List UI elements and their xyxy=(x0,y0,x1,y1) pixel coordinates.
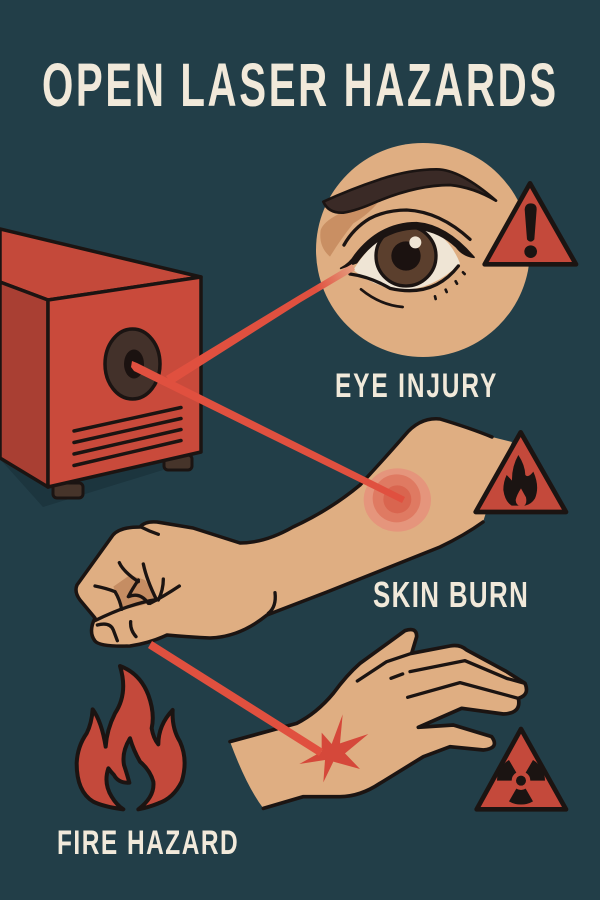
fist details xyxy=(95,527,275,641)
warning triangle: radiation xyxy=(477,729,566,809)
warning triangle: exclamation xyxy=(485,183,576,264)
laser beam to arm xyxy=(131,361,405,503)
iris xyxy=(376,226,436,286)
eye drawing xyxy=(320,169,496,307)
label: fire hazard: FIRE HAZARD xyxy=(57,824,238,862)
arm with fist xyxy=(76,419,512,646)
lens xyxy=(105,329,160,399)
laser beam to eye xyxy=(166,264,355,384)
laser beam to hand xyxy=(148,641,323,756)
eye panel xyxy=(316,143,530,357)
laser strike star xyxy=(299,714,368,782)
warning triangle: flame xyxy=(476,432,566,512)
vents xyxy=(74,408,181,466)
title: OPEN LASER HAZARDS xyxy=(42,51,556,119)
box foot: left xyxy=(53,483,83,498)
box foot: right xyxy=(164,455,192,470)
label: eye injury: EYE INJURY xyxy=(335,367,496,405)
hand with laser strike xyxy=(230,630,526,808)
burn mark xyxy=(364,468,431,532)
eyebrow xyxy=(323,169,496,213)
label: skin burn: SKIN BURN xyxy=(373,575,528,615)
fire icon xyxy=(77,666,185,809)
laser emitter box xyxy=(0,229,201,507)
